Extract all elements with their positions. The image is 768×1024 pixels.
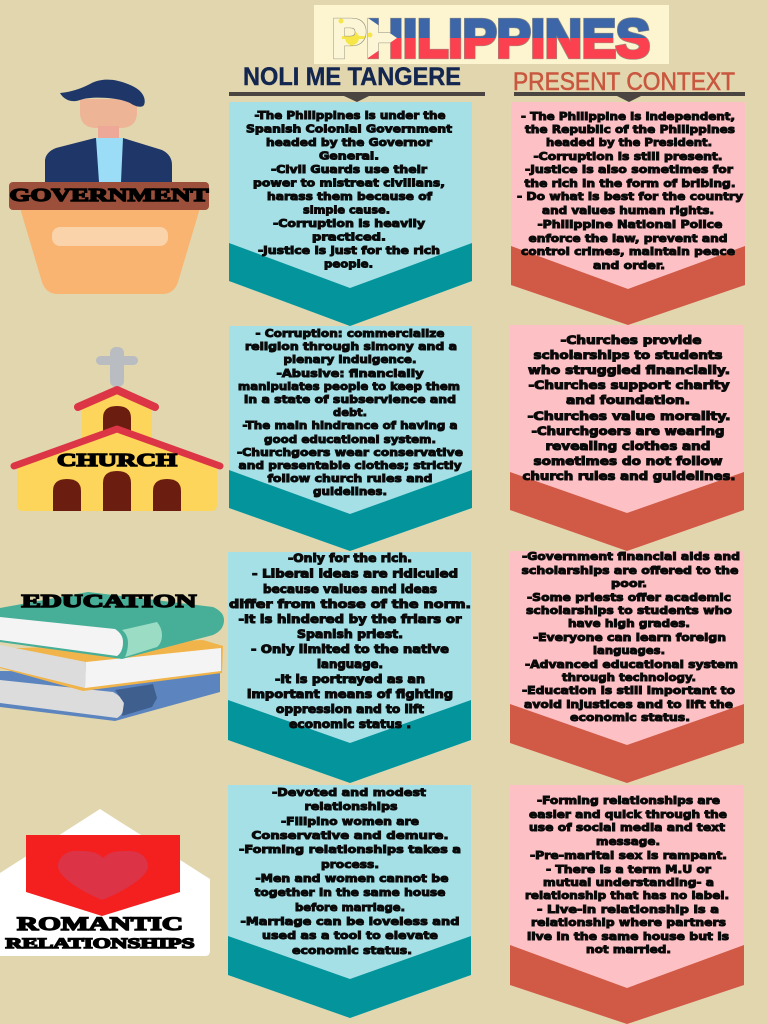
text: present education: poor. bbox=[611, 578, 647, 590]
text: noli church: debt. bbox=[333, 407, 367, 419]
text: present education: scholarships are offered to the bbox=[522, 565, 738, 577]
text: noli relationships: together in the same house bbox=[254, 887, 446, 899]
text: present government: the rich in the form of bribing. bbox=[524, 178, 736, 190]
text: noli government: -Civil Guards use their bbox=[271, 164, 428, 176]
text: noli relationships: process. bbox=[321, 859, 379, 871]
panel: present government bbox=[511, 102, 745, 325]
panel: present relationships bbox=[510, 785, 744, 1024]
text: present church: -Churches support charity bbox=[528, 378, 730, 392]
label: romantic relationships: RELATIONSHIPS bbox=[6, 936, 194, 952]
text: present relationships: not married. bbox=[586, 944, 671, 956]
text: noli education: -It is hindered by the friars or bbox=[238, 612, 462, 626]
text: noli relationships: economic status. bbox=[292, 945, 412, 957]
text: noli education: differ from those of the norm. bbox=[229, 597, 471, 611]
text: present education bbox=[522, 551, 740, 724]
text: noli education: economic status . bbox=[289, 717, 411, 731]
text: present government: - Do what is best for the country bbox=[517, 191, 743, 203]
text: noli relationships: Conservative and demure. bbox=[252, 830, 448, 842]
text: present government: and order. bbox=[593, 260, 665, 272]
text: present relationships: -Forming relationships are bbox=[537, 795, 720, 807]
text: noli church: guidelines. bbox=[313, 486, 387, 498]
text: noli education bbox=[229, 551, 471, 731]
text: present government: the Republic of the Philippines bbox=[525, 124, 735, 136]
text: present church: sometimes do not follow bbox=[534, 454, 723, 468]
icon: government speaker at podium bbox=[9, 80, 209, 294]
text: present education: through technology. bbox=[562, 672, 696, 684]
text: noli education: -It is portrayed as an bbox=[275, 672, 425, 686]
text: present education: -Education is still important to bbox=[522, 685, 735, 697]
text: present church: and foundation. bbox=[566, 393, 690, 407]
text: present government: enforce the law, prevent and bbox=[528, 233, 728, 245]
text: noli relationships: used as a tool to elevate bbox=[262, 930, 438, 942]
text: present government: -Justice is also sometimes for bbox=[525, 164, 734, 176]
text: noli education: - Liberal ideas are ridiculed bbox=[252, 566, 458, 580]
heading: Noli Me Tangere bbox=[229, 63, 485, 102]
text: noli relationships: -Men and women cannot be bbox=[256, 873, 448, 885]
text: noli education: - Only limited to the native bbox=[251, 642, 449, 656]
text: present government: -Philippine National Police bbox=[538, 219, 722, 231]
text: noli government: headed by the Governor bbox=[266, 137, 433, 149]
icon: envelope with heart bbox=[0, 809, 210, 956]
text: noli relationships: -Filipino women are bbox=[281, 816, 419, 828]
panel: noli church bbox=[229, 326, 472, 551]
text: present education: avoid injustices and to lift the bbox=[524, 699, 733, 711]
text: noli education: -Only for the rich. bbox=[288, 551, 412, 565]
text: present relationships: message. bbox=[596, 836, 660, 848]
text: present relationships: relationship where partners bbox=[531, 917, 726, 929]
text: noli government: simple cause. bbox=[303, 204, 390, 216]
text: present education: -Advanced educational system bbox=[525, 659, 738, 671]
label: education: EDUCATION bbox=[22, 591, 196, 611]
text: present relationships: easier and quick through the bbox=[529, 809, 727, 821]
text: noli education: because values and ideas bbox=[263, 582, 437, 596]
text: noli government bbox=[246, 110, 452, 270]
text: noli government: -Corruption is heavily bbox=[273, 218, 425, 230]
panel: present church bbox=[510, 325, 744, 551]
text: noli church: in a state of subservience and bbox=[244, 394, 456, 406]
text: noli church: -Abusive: financially bbox=[276, 368, 424, 380]
text: present relationships: use of social media and text bbox=[529, 822, 725, 834]
text: noli church: manipulates people to keep them bbox=[238, 381, 460, 393]
text: noli government: General. bbox=[319, 150, 379, 162]
text: noli government: people. bbox=[324, 258, 373, 270]
text: present government: control crimes, maintain peace bbox=[521, 246, 735, 258]
text: noli relationships: before marriage. bbox=[295, 902, 405, 914]
label: government: GOVERNMENT bbox=[10, 185, 209, 205]
text: present church: who struggled financially. bbox=[528, 363, 730, 377]
text: present church: -Churches value morality. bbox=[528, 409, 730, 423]
text: noli education: language. bbox=[317, 657, 383, 671]
text: present church: revealing clothes and bbox=[546, 439, 710, 453]
text: noli relationships: relationships bbox=[304, 801, 398, 813]
text: present relationships: live in the same house but is bbox=[527, 931, 729, 943]
text: present education: have high grades. bbox=[568, 618, 690, 630]
panel: noli government bbox=[229, 102, 472, 326]
text: present education: -Some priests offer academic bbox=[527, 592, 731, 604]
text: noli government: harass them because of bbox=[267, 191, 433, 203]
icon: church bbox=[14, 347, 220, 511]
text: noli church: good educational system. bbox=[264, 434, 436, 446]
panel: noli education bbox=[228, 551, 471, 783]
text: noli church: - Corruption: commercialize bbox=[256, 328, 444, 340]
text: present education: economic status. bbox=[570, 712, 690, 724]
text: present relationships: -Pre-marital sex is rampant. bbox=[530, 850, 727, 862]
text: noli relationships: -Marriage can be loveless and bbox=[240, 916, 460, 928]
icon: stack of books bbox=[0, 591, 224, 721]
heading: Present Context: PRESENT CONTEXT bbox=[513, 68, 735, 96]
text: present relationships bbox=[525, 795, 729, 956]
text: present government: -Corruption is still present. bbox=[534, 151, 722, 163]
text: present relationships: mutual understanding- a bbox=[543, 877, 714, 889]
heading: Noli Me Tangere: NOLI ME TANGERE bbox=[243, 63, 461, 91]
text: present relationships: relationship that has no label. bbox=[525, 890, 729, 902]
text: noli education: Spanish priest. bbox=[297, 627, 403, 641]
label: romantic relationships: ROMANTIC bbox=[17, 914, 183, 935]
text: noli government: -The Philippines is under the bbox=[254, 110, 446, 122]
text: noli church: follow church rules and bbox=[268, 473, 432, 485]
text: noli church: plenary indulgence. bbox=[284, 354, 416, 366]
text: present relationships: - There is a term M.U or bbox=[546, 864, 712, 876]
text: noli government: power to mistreat civilians, bbox=[253, 178, 445, 190]
text: present church: -Churches provide bbox=[560, 333, 702, 347]
text: present government: - The Philippine is independent, bbox=[521, 111, 735, 123]
text: noli relationships bbox=[239, 787, 461, 957]
text: noli relationships: -Forming relationships takes a bbox=[239, 844, 461, 856]
text: noli church: -The main hindrance of having a bbox=[242, 420, 458, 432]
text: present education: -Government financial aids and bbox=[522, 551, 740, 563]
label: church: CHURCH bbox=[57, 450, 177, 470]
text: present church: church rules and guidelines. bbox=[522, 469, 736, 483]
text: noli church bbox=[237, 328, 463, 498]
text: noli government: Spanish Colonial Government bbox=[246, 124, 452, 136]
text: present education: -Everyone can learn foreign bbox=[533, 632, 726, 644]
text: noli education: important means of fighting bbox=[247, 687, 453, 701]
text: noli relationships: -Devoted and modest bbox=[272, 787, 426, 799]
text: present education: languages. bbox=[593, 645, 665, 657]
text: present government: headed by the President. bbox=[546, 137, 712, 149]
text: noli government: practiced. bbox=[312, 232, 386, 244]
text: present relationships: - Live-in relationship is a bbox=[537, 904, 719, 916]
title: PHILIPPINES bbox=[332, 9, 650, 69]
text: noli church: religion through simony and a bbox=[245, 341, 457, 353]
text: present church bbox=[522, 333, 736, 483]
text: noli government: -Justice is just for the rich bbox=[258, 245, 440, 257]
text: noli education: oppression and to lift bbox=[276, 702, 425, 716]
panel: present education bbox=[510, 551, 744, 783]
text: present church: -Churchgoers are wearing bbox=[532, 424, 724, 438]
text: present government: and values human rights. bbox=[542, 205, 714, 217]
panel: noli relationships bbox=[228, 785, 471, 1018]
text: noli church: and presentable clothes; strictly bbox=[238, 460, 462, 472]
text: present church: scholarships to students bbox=[534, 348, 723, 362]
text: noli church: -Churchgoers wear conservative bbox=[237, 447, 463, 459]
text: present government bbox=[517, 111, 743, 272]
text: present education: scholarships to students who bbox=[526, 605, 732, 617]
label: romantic relationships bbox=[6, 914, 194, 952]
